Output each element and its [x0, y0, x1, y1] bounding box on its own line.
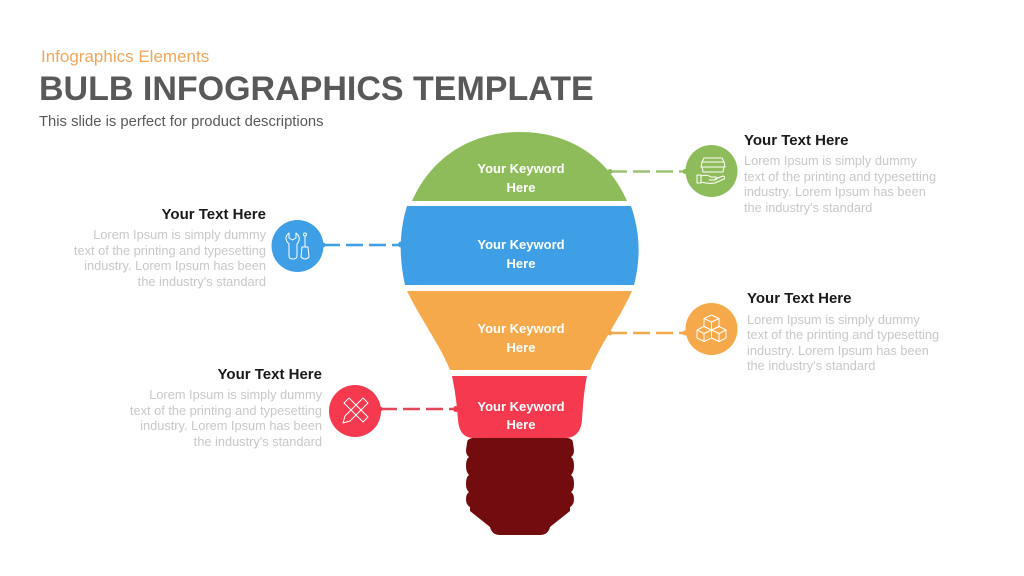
body text: the industry's standard — [744, 200, 872, 215]
bulb segment: orange — [407, 291, 632, 370]
body text: industry. Lorem Ipsum has been — [140, 418, 322, 433]
eyebrow: Infographics Elements — [41, 47, 209, 66]
bulb segment: green — [412, 132, 627, 201]
body text: text of the printing and typesetting — [130, 403, 322, 418]
bulb segment: orange: Your Keyword — [477, 321, 565, 336]
connector — [608, 330, 688, 336]
connector — [320, 242, 404, 248]
icon: wrench and screwdriver — [272, 220, 324, 272]
bulb screw base — [466, 438, 574, 535]
body text: Lorem Ipsum is simply dummy — [93, 227, 267, 242]
heading: Your Text Here — [218, 366, 322, 383]
body text: the industry's standard — [747, 358, 875, 373]
bulb segment: blue — [401, 206, 639, 285]
icon: pencil and ruler — [329, 385, 381, 437]
body text: the industry's standard — [138, 274, 266, 289]
body text — [744, 153, 936, 215]
bulb segment: blue: Here — [507, 256, 535, 271]
body text: the industry's standard — [194, 434, 322, 449]
callout: right lower — [608, 290, 939, 373]
body text: Lorem Ipsum is simply dummy — [747, 312, 920, 327]
title: BULB INFOGRAPHICS TEMPLATE — [39, 70, 594, 108]
connector — [608, 169, 688, 174]
body text — [747, 312, 939, 373]
icon: hand holding stack — [686, 145, 738, 197]
body text: industry. Lorem Ipsum has been — [744, 184, 926, 199]
connector — [378, 406, 459, 412]
body text: text of the printing and typesetting — [74, 243, 266, 258]
lightbulb — [401, 132, 639, 535]
body text — [130, 387, 323, 449]
header — [39, 47, 594, 130]
body text: Lorem Ipsum is simply dummy — [744, 153, 917, 168]
body text: text of the printing and typesetting — [747, 327, 939, 342]
bulb segment: orange: Here — [507, 340, 535, 355]
subtitle: This slide is perfect for product descriptions — [39, 114, 324, 130]
callout: left upper — [74, 206, 404, 289]
callout: left lower — [130, 366, 459, 449]
callout: top right — [608, 132, 936, 215]
icon: cubes — [686, 303, 738, 355]
bulb segment: red: Here — [507, 417, 535, 432]
heading: Your Text Here — [744, 132, 848, 149]
body text: industry. Lorem Ipsum has been — [84, 258, 266, 273]
body text — [74, 227, 267, 289]
bulb segment: red: Your Keyword — [477, 399, 565, 414]
bulb segment: red — [452, 376, 587, 438]
bulb segment: blue: Your Keyword — [477, 237, 565, 252]
bulb segment: green: Here — [507, 180, 535, 195]
heading: Your Text Here — [747, 290, 851, 307]
bulb segment: green: Your Keyword — [477, 161, 565, 176]
body text: Lorem Ipsum is simply dummy — [149, 387, 323, 402]
heading: Your Text Here — [162, 206, 266, 223]
body text: text of the printing and typesetting — [744, 169, 936, 184]
body text: industry. Lorem Ipsum has been — [747, 343, 929, 358]
